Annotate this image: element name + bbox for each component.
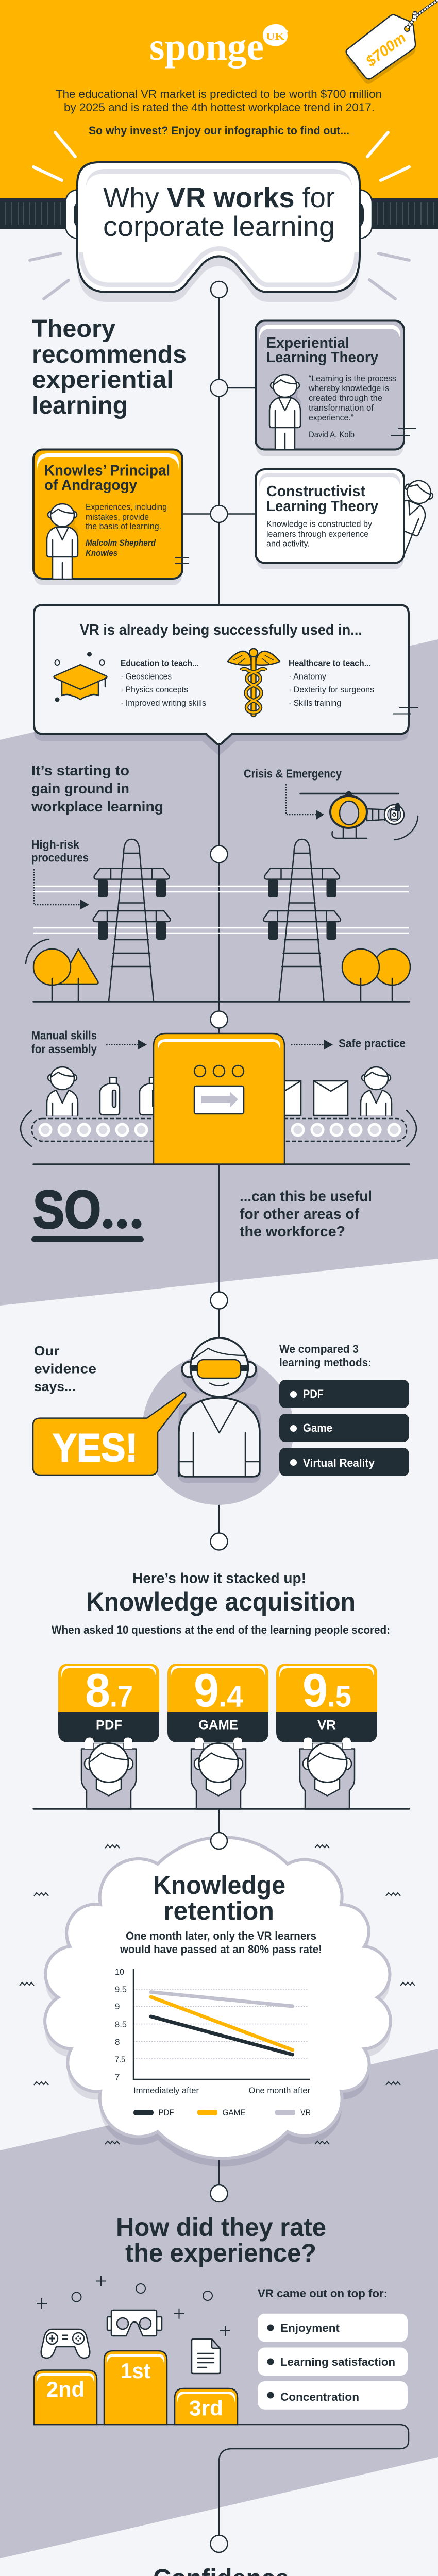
line chart: 7.5 <box>115 2055 125 2064</box>
method pill: Virtual Reality: Virtual Reality <box>303 1456 375 1469</box>
education list <box>121 658 206 708</box>
timeline node: evidence <box>210 1292 228 1309</box>
header yellow background <box>0 0 438 198</box>
retention subheading: One month later, only the VR learners <box>126 1929 316 1942</box>
card heading: Experiential <box>266 335 349 351</box>
card heading: Knowles’ Principal <box>44 463 170 479</box>
line chart <box>115 1967 311 2117</box>
podium: 2nd: 2nd <box>46 2377 85 2401</box>
legend: GAME <box>223 2108 245 2117</box>
heading: starting to gain ground: It’s starting to <box>31 762 129 778</box>
heading: our evidence says: Our <box>34 1343 59 1359</box>
text: we compared 3 learning methods: learning methods: <box>279 1356 372 1369</box>
card heading <box>44 463 170 494</box>
score card: PDF: PDF <box>96 1718 122 1732</box>
icon: left pylon <box>93 839 170 1001</box>
person: Malcolm Knowles <box>47 504 78 579</box>
decorative squiggles <box>20 1845 415 2144</box>
text: can this be useful <box>240 1188 372 1240</box>
panel: experiential learning theory <box>256 320 416 456</box>
conveyor belt <box>21 1110 416 1146</box>
line chart: 7 <box>115 2072 120 2082</box>
person holding GAME score <box>191 1737 246 1809</box>
intro text <box>56 88 382 137</box>
intro text: So why invest? Enjoy our infographic to find out... <box>89 124 349 137</box>
heading: VR is already being successfully used in... <box>80 622 362 638</box>
line chart: One month after <box>248 2086 310 2095</box>
person: David Kolb <box>269 375 301 450</box>
score card: VR <box>276 1664 377 1742</box>
arrow: safe practice <box>291 1040 333 1049</box>
method pill: Game: Game <box>303 1421 332 1434</box>
panel: Knowles principal of andragogy <box>33 449 189 585</box>
line chart: 8.5 <box>115 2020 127 2029</box>
heading: starting to gain ground: gain ground in <box>31 781 129 796</box>
icon: envelopes <box>278 1081 348 1115</box>
heading: theory recommends experiential learning: Theory <box>32 315 115 343</box>
score card: PDF <box>58 1664 159 1742</box>
icon: document <box>192 2339 220 2374</box>
heading: starting to gain ground: workplace learning <box>31 799 163 815</box>
heading: how did they rate the experience <box>116 2213 326 2267</box>
card heading <box>266 335 378 366</box>
arrow: crisis to helicopter <box>286 784 324 820</box>
connectors from timeline to cards <box>182 388 256 514</box>
arrow: manual skills <box>106 1040 147 1049</box>
text: when asked 10 questions: When asked 10 questions at the end of the learning people scored: <box>52 1623 390 1636</box>
light rays around headset <box>30 132 409 299</box>
text: here's how it stacked up: Here’s how it stacked up! <box>132 1570 306 1586</box>
heading: how did they rate the experience: the experience? <box>125 2239 316 2267</box>
line chart: 10 <box>115 1967 124 1977</box>
text: VR came out on top for: VR came out on top for: <box>258 2287 388 2300</box>
card text: Knowles <box>86 548 117 558</box>
icon: helicopter <box>300 791 418 840</box>
line chart: 9.5 <box>115 1985 127 1994</box>
headset body with title <box>77 162 360 302</box>
heading: theory recommends experiential learning: experiential <box>32 366 174 394</box>
decorative plus signs and rings <box>37 2276 230 2336</box>
logo: sponge UK: sponge <box>149 25 264 69</box>
label: crisis and emergency: Crisis & Emergency <box>244 767 342 780</box>
result pill: Concentration <box>258 2381 408 2410</box>
method pill: Game <box>279 1414 409 1442</box>
grey circle behind VR person <box>142 1353 294 1505</box>
card text: Knowledge is constructed by <box>266 519 372 529</box>
healthcare list <box>289 658 374 708</box>
result pill: Learning satisfaction: Learning satisfaction <box>280 2355 395 2368</box>
node under headset <box>211 281 227 298</box>
education list: · Physics concepts <box>121 685 188 694</box>
intro text: by 2025 and is rated the 4th hottest workplace trend in 2017. <box>64 101 375 114</box>
heading: theory recommends experiential learning: learning <box>32 392 128 419</box>
heading: SO... <box>31 1180 144 1242</box>
label: safe practice: Safe practice <box>339 1037 406 1050</box>
person: before machine <box>47 1067 78 1115</box>
card text: mistakes, provide <box>86 512 149 522</box>
result pill: Concentration: Concentration <box>280 2391 359 2403</box>
timeline node: experiential <box>210 379 228 397</box>
price tag $700m <box>346 0 438 84</box>
text: can this be useful: for other areas of <box>240 1206 359 1223</box>
score card: GAME: .4 <box>218 1680 243 1714</box>
card text: and activity. <box>266 539 310 548</box>
icon: trees left <box>26 939 98 1001</box>
podium: 2nd <box>34 2370 97 2425</box>
legend <box>133 2108 311 2117</box>
score card: VR: VR <box>317 1718 336 1732</box>
icon: trees right <box>342 949 410 1001</box>
card heading: Learning Theory <box>266 498 378 515</box>
title: corporate learning <box>103 210 335 242</box>
quote: David A. Kolb <box>309 430 355 439</box>
ground line 3 <box>33 1808 409 1810</box>
card text: the basis of learning. <box>86 521 161 531</box>
timeline node: pylons <box>210 846 228 862</box>
grey background band: retention and rating <box>0 2049 438 2558</box>
heading: starting to gain ground <box>31 762 163 815</box>
text: can this be useful: ...can this be useful <box>240 1188 372 1205</box>
line chart: 8 <box>115 2037 120 2047</box>
icon: right pylon <box>263 839 341 1001</box>
retention subheading <box>120 1929 322 1956</box>
panel: knowledge retention cloud <box>45 1837 391 2166</box>
line chart: 9 <box>115 2002 120 2011</box>
heading: knowledge retention <box>153 1871 285 1925</box>
person holding VR score <box>300 1737 355 1809</box>
quote: “Learning is the process <box>309 374 396 383</box>
card text: Malcolm Shepherd <box>86 538 156 548</box>
timeline node: andragogy and constructivist <box>210 505 228 522</box>
heading: knowledge retention: Knowledge <box>153 1871 285 1900</box>
method pill: PDF: PDF <box>303 1387 324 1400</box>
intro text: The educational VR market is predicted to be worth $700 million <box>56 88 382 100</box>
icon: VR viewer <box>107 2310 162 2336</box>
healthcare list: · Anatomy <box>289 672 326 681</box>
score card: PDF: 8 <box>85 1664 110 1717</box>
education list: Education to teach... <box>121 658 199 668</box>
result pill: Enjoyment: Enjoyment <box>280 2321 340 2334</box>
timeline node: confidence <box>210 2535 228 2552</box>
healthcare list: Healthcare to teach... <box>289 658 371 668</box>
line chart: Immediately after <box>133 2086 199 2095</box>
card text <box>86 502 167 558</box>
heading: our evidence says <box>34 1343 96 1394</box>
timeline vertical line <box>218 298 220 2185</box>
callout: YES!: YES! <box>53 1426 138 1470</box>
ground line 2 <box>33 1163 409 1165</box>
card heading: Learning Theory <box>266 349 378 366</box>
healthcare list: · Dexterity for surgeons <box>289 685 374 694</box>
heading: theory recommends experiential learning <box>32 315 187 419</box>
callout: YES! <box>33 1393 186 1475</box>
label: high-risk procedures <box>31 838 89 865</box>
podium: 1st <box>104 2351 167 2425</box>
grey background band: workplace learning <box>0 639 438 1306</box>
label: manual skills: for assembly <box>31 1042 97 1056</box>
quote <box>308 374 396 439</box>
score card: GAME: 9 <box>194 1664 219 1717</box>
power lines <box>33 886 409 933</box>
icon: bottles <box>100 1078 159 1115</box>
card text <box>266 519 372 548</box>
card text: Experiences, including <box>86 502 167 512</box>
panel: constructivist learning theory <box>256 469 404 569</box>
heading: SO...: SO <box>33 1180 101 1240</box>
heading: our evidence says: evidence <box>34 1361 96 1377</box>
method pill: Virtual Reality <box>279 1448 409 1476</box>
heading: knowledge retention: retention <box>163 1896 274 1925</box>
arrow: high-risk to pylon <box>34 869 89 909</box>
person peeking from constructivist card <box>381 476 437 557</box>
podium: 3rd <box>175 2388 238 2425</box>
heading: knowledge acquisition: Knowledge acquisition <box>86 1587 356 1616</box>
quote: created through the <box>309 393 382 403</box>
score card: VR: 9 <box>302 1664 328 1717</box>
heading: our evidence says: says... <box>34 1379 76 1394</box>
label: manual skills: Manual skills <box>31 1029 97 1042</box>
podium base line leading to timeline <box>33 2425 409 2535</box>
timeline node: rating <box>210 2185 228 2202</box>
card heading: Constructivist <box>266 483 365 500</box>
score card: PDF: .7 <box>110 1680 133 1714</box>
logo: sponge UK: UK <box>266 31 285 42</box>
text: we compared 3 learning methods <box>279 1343 372 1369</box>
heading: theory recommends experiential learning: recommends <box>32 341 187 368</box>
healthcare list: · Skills training <box>289 698 341 708</box>
card heading <box>266 483 378 515</box>
timeline node: cloud top <box>211 1833 227 1849</box>
person: after machine <box>361 1067 392 1115</box>
ground line <box>33 1001 409 1003</box>
person wearing VR headset <box>177 1338 261 1483</box>
score card: GAME: GAME <box>198 1718 238 1732</box>
quote: experience.” <box>309 413 353 422</box>
person holding PDF score <box>81 1737 136 1809</box>
label: manual skills <box>31 1029 97 1056</box>
method pill: PDF <box>279 1380 409 1408</box>
machine <box>154 1033 284 1164</box>
education list: · Improved writing skills <box>121 698 206 708</box>
label: high-risk procedures: High-risk <box>31 838 79 851</box>
label: high-risk procedures: procedures <box>31 851 89 865</box>
title: Why VR works for <box>103 181 335 213</box>
icon: caduceus <box>228 649 280 717</box>
podium: 3rd: 3rd <box>189 2396 223 2420</box>
score card: VR: .5 <box>327 1680 351 1714</box>
headset strap <box>0 190 438 239</box>
heading: how did they rate the experience: How did they rate <box>116 2213 326 2242</box>
card heading: of Andragogy <box>44 477 137 494</box>
card text: learners through experience <box>266 529 368 539</box>
text: we compared 3 learning methods: We compared 3 <box>279 1343 359 1355</box>
retention subheading: would have passed at an 80% pass rate! <box>120 1943 322 1956</box>
legend: VR <box>300 2108 311 2117</box>
text: can this be useful: the workforce? <box>240 1224 345 1240</box>
timeline node: conveyor <box>210 1011 228 1028</box>
podium: 1st: 1st <box>121 2359 150 2383</box>
title <box>103 181 335 242</box>
panel: VR is already being successfully used in <box>34 605 418 756</box>
score card: GAME <box>167 1664 268 1742</box>
result pill: Learning satisfaction <box>258 2347 408 2376</box>
legend: PDF <box>159 2108 174 2117</box>
timeline node: stacked up <box>210 1533 228 1550</box>
price tag $700m: $700m <box>363 29 409 70</box>
result pill: Enjoyment <box>258 2314 408 2342</box>
quote: transformation of <box>309 403 374 413</box>
icon: graduation cap <box>54 652 107 702</box>
quote: whereby knowledge is <box>308 383 389 393</box>
icon: game controller <box>41 2329 90 2358</box>
education list: · Geosciences <box>121 672 172 681</box>
